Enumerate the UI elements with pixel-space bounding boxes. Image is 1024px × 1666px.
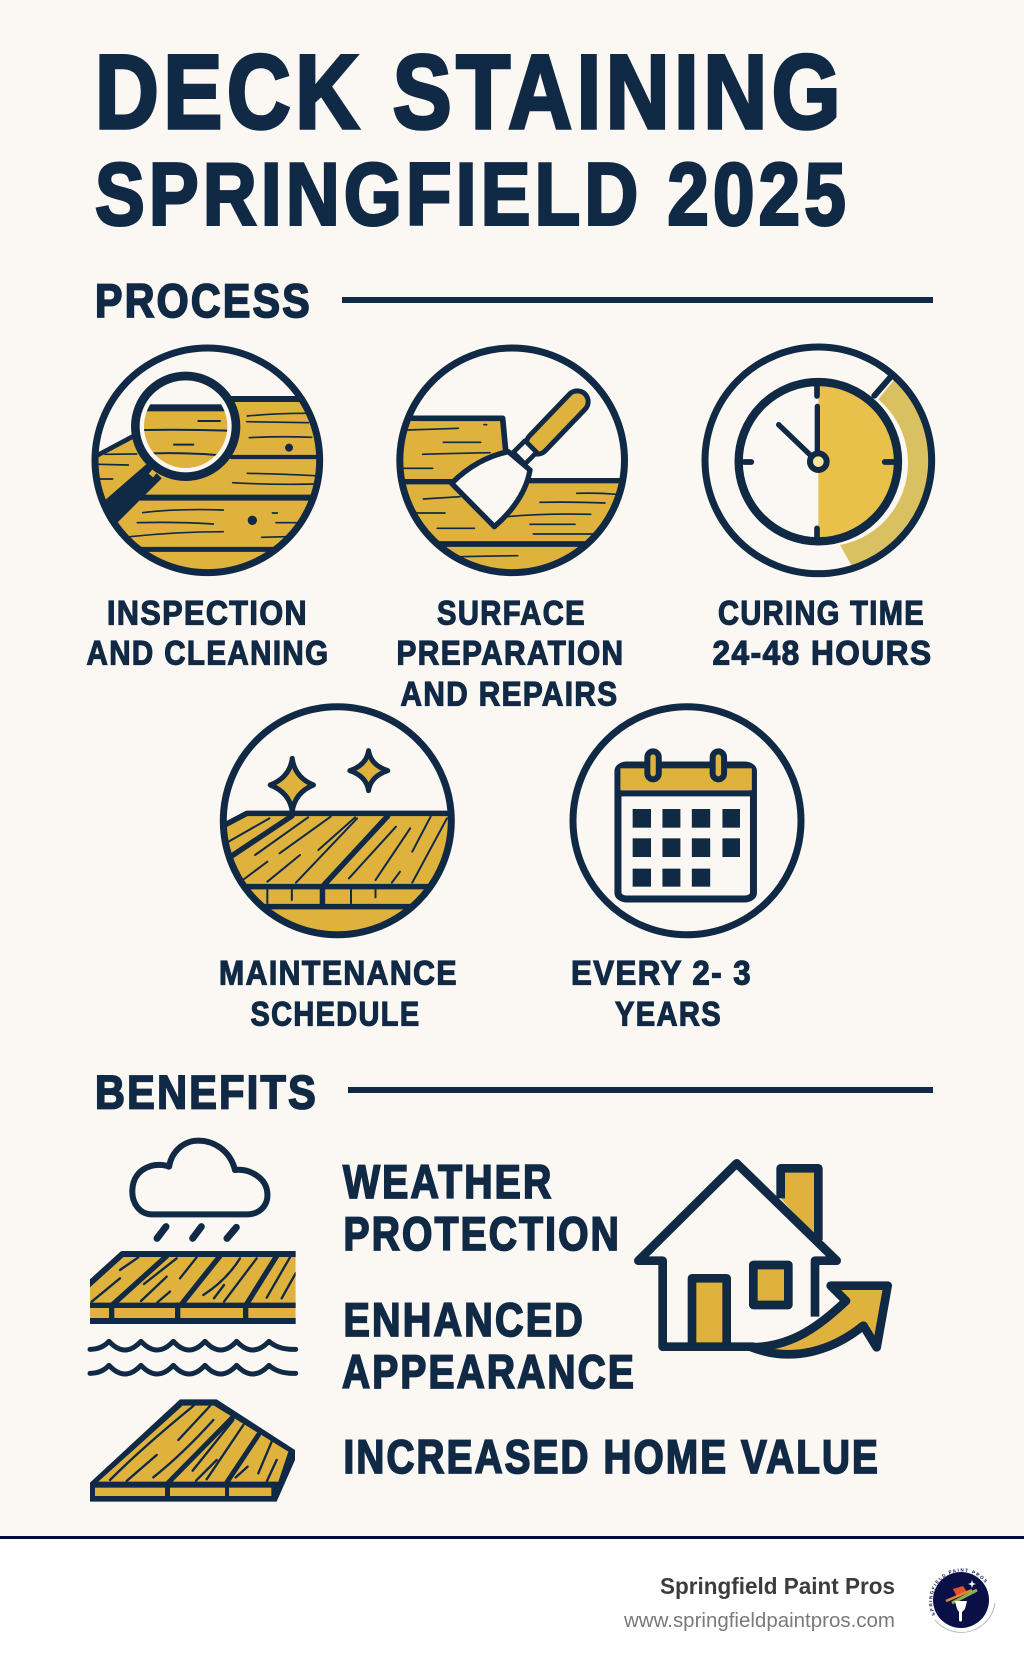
title: DECK STAINING — [95, 34, 845, 151]
heading: benefits — [95, 1066, 933, 1118]
heading: process: PROCESS — [95, 274, 312, 327]
company logo: SPRINGFIELD PAINT PROS — [928, 1568, 987, 1616]
label: surface preparation and repairs: PREPARATION — [396, 635, 624, 673]
magnifier lens — [135, 376, 236, 477]
footer — [0, 1536, 1024, 1666]
raindrops — [157, 1227, 236, 1238]
label: every 2-3 years — [571, 954, 752, 1033]
label: inspection and cleaning: INSPECTION — [107, 594, 308, 632]
heading: benefits: BENEFITS — [95, 1066, 318, 1118]
label: curing time 24-48 hours: 24-48 HOURS — [712, 635, 932, 673]
label: inspection and cleaning: AND CLEANING — [86, 635, 330, 673]
sparkles — [270, 751, 388, 812]
company name: Springfield Paint Pros — [660, 1573, 895, 1599]
benefit: weather protection: WEATHER — [343, 1155, 554, 1208]
benefit: enhanced appearance: APPEARANCE — [342, 1345, 636, 1398]
icon: rain on deck with water waves — [83, 1141, 296, 1502]
label: every 2-3 years: YEARS — [615, 995, 722, 1033]
scraper tool — [452, 402, 577, 527]
rising arrow — [752, 1286, 888, 1354]
label: curing time 24-48 hours — [712, 594, 932, 673]
label: surface preparation and repairs: AND REPAIRS — [400, 675, 618, 713]
cloud — [132, 1141, 267, 1214]
label: maintenance schedule — [219, 954, 458, 1033]
benefit: weather protection — [343, 1155, 621, 1260]
label: surface preparation and repairs — [396, 594, 624, 713]
benefit: enhanced appearance: ENHANCED — [344, 1293, 585, 1346]
icon: maintenance deck with sparkles — [216, 707, 461, 950]
label: maintenance schedule: SCHEDULE — [250, 995, 420, 1033]
water waves — [90, 1341, 296, 1374]
icon: clock curing time — [705, 347, 932, 574]
icon: house with rising arrow — [638, 1163, 888, 1354]
deck plank — [83, 1254, 296, 1321]
label: curing time 24-48 hours: CURING TIME — [718, 594, 925, 632]
label: surface preparation and repairs: SURFACE — [437, 594, 586, 632]
title — [95, 34, 850, 244]
company logo — [928, 1568, 996, 1633]
benefit: weather protection: PROTECTION — [344, 1207, 621, 1260]
website: www.springfieldpaintpros.com — [623, 1609, 895, 1632]
deck section — [90, 1399, 295, 1502]
label: every 2-3 years: EVERY 2- 3 — [571, 954, 752, 992]
icon: scraper on wood — [397, 348, 633, 583]
title: SPRINGFIELD 2025 — [95, 144, 850, 244]
icon: magnifying glass over wood — [90, 348, 327, 583]
heading: process — [95, 274, 933, 327]
label: inspection and cleaning — [86, 594, 330, 673]
benefit: enhanced appearance — [342, 1293, 636, 1398]
benefit: increased home value: INCREASED HOME VALUE — [344, 1430, 880, 1483]
label: maintenance schedule: MAINTENANCE — [219, 954, 458, 992]
icon: calendar — [573, 707, 801, 935]
